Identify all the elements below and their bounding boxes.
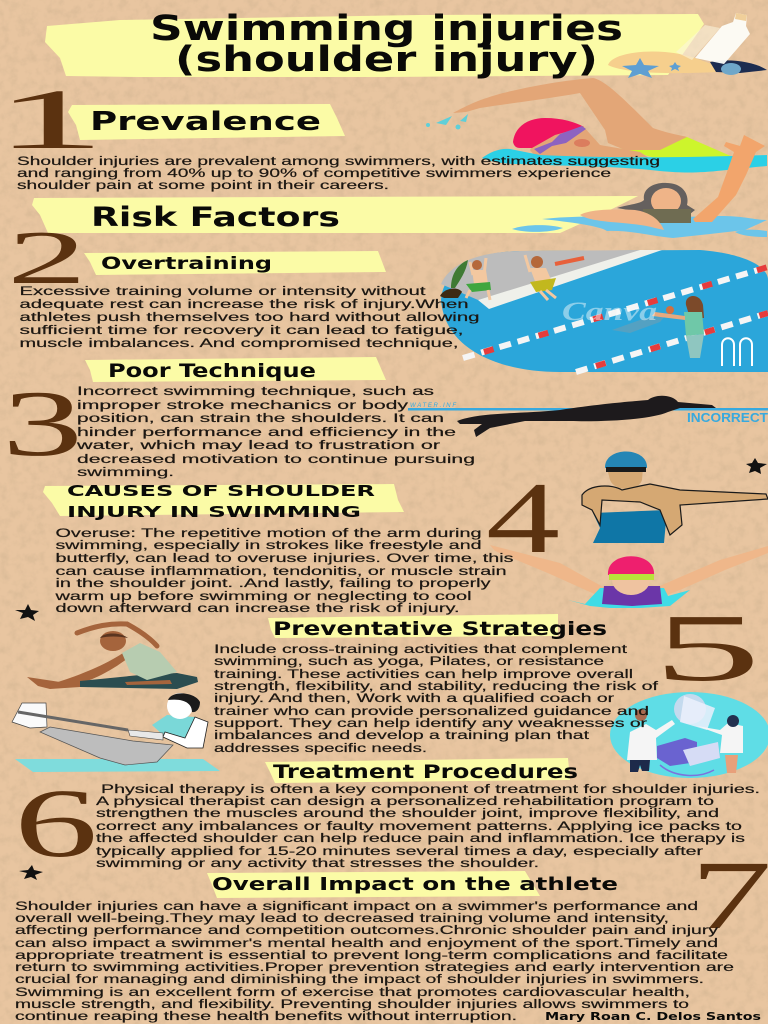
Preventative Strategies heading band: Preventative Strategies (273, 618, 607, 640)
Poor Technique text: swimming. (77, 465, 174, 479)
Preventative text: Include cross-training activities that complement (214, 642, 628, 656)
Treatment text: strengthen the muscles around the shoulder joint, improve flexibility, and (96, 806, 719, 820)
Poor Technique text: water, which may lead to frustration or (75, 438, 440, 452)
Overtraining text: muscle imbalances. And compromised technique, (20, 336, 458, 350)
author credit: Mary Roan C. Delos Santos (545, 1011, 761, 1023)
Poor Technique text: Incorrect swimming technique, such as (77, 384, 434, 398)
illustration: incorrect swimming position silhouette: INCORRECT (687, 410, 768, 425)
illustration: incorrect swimming position silhouette: WATER.INF (410, 403, 456, 409)
Prevalence heading band: Prevalence (90, 107, 321, 137)
palm plant (440, 289, 462, 298)
Preventative text (214, 642, 659, 755)
Treatment text (96, 782, 760, 870)
illustration: mat (15, 759, 220, 772)
Treatment text: swimming or any activity that stresses the shoulder. (96, 856, 539, 870)
illustration: butterfly swimmer (490, 545, 768, 608)
number 2: 2 (7, 216, 87, 300)
title (150, 9, 623, 80)
Preventative text: addresses specific needs. (214, 741, 427, 755)
Overtraining text: athletes push themselves too hard without allowing (20, 310, 480, 324)
number 5: 5 (653, 594, 761, 701)
Overall Impact heading band: Overall Impact on the athlete (212, 875, 618, 895)
star (746, 458, 767, 474)
illustration: beach sand with bottle, starfish and shell (608, 13, 767, 78)
Overall Impact text (15, 899, 734, 1023)
Overall Impact text: continue reaping these health benefits without interruption. (15, 1009, 517, 1023)
Causes text (54, 526, 513, 615)
Prevalence text (17, 154, 660, 192)
Causes text: in the shoulder joint. .And lastly, failing to properly (56, 576, 492, 590)
lane ropes (463, 267, 768, 358)
instructor and child in water (652, 296, 704, 358)
ladder (722, 338, 752, 366)
Preventative text: swimming, such as yoga, Pilates, or resistance (214, 654, 604, 668)
Poor Technique text: hinder performance and efficiency in the (77, 425, 456, 439)
child on deck, yellow shorts (525, 255, 556, 300)
Treatment text: correct any imbalances or faulty movement patterns. Applying ice packs to (96, 819, 742, 833)
illustration: resistance band exercise (12, 693, 208, 765)
Causes heading band (43, 482, 404, 521)
illustration: stretching swimmer with blue cap (582, 452, 768, 543)
Causes text: swimming, especially in strokes like freestyle and (56, 538, 482, 552)
float on deck (555, 258, 584, 264)
Preventative text: support. They can help identify any weaknesses or (214, 716, 647, 730)
Treatment text: the affected shoulder can help reduce pain and inflammation. Ice therapy is (96, 831, 745, 845)
Overtraining text (20, 284, 480, 350)
Prevalence heading band (68, 104, 345, 140)
Overtraining heading band: Overtraining (101, 254, 272, 274)
number 3: 3 (2, 372, 83, 476)
number 4: 4 (486, 462, 560, 575)
Poor Technique text: improper stroke mechanics or body (77, 398, 410, 412)
Prevalence text: Shoulder injuries are prevalent among swimmers, with estimates suggesting (17, 154, 660, 168)
Preventative text: injury. And then, Work with a qualified coach or (214, 691, 614, 705)
Causes text: down afterward can increase the risk of injury. (56, 601, 460, 615)
star (19, 865, 43, 880)
Causes heading band: CAUSES OF SHOULDER (67, 482, 375, 500)
illustration: doctors in teal circle (610, 692, 768, 778)
Causes text: Overuse: The repetitive motion of the arm during (56, 526, 482, 540)
Overall Impact text: can also impact a swimmer's mental health and enjoyment of the sport.Timely and (15, 936, 718, 950)
Overall Impact text: return to swimming activities.Proper prevention strategies and early intervention are (15, 960, 734, 974)
Overall Impact text: affecting performance and competition outcomes.Chronic shoulder pain and injury (15, 923, 719, 937)
Overtraining text: adequate rest can increase the risk of injury.When (20, 297, 468, 311)
Causes text: warm up before swimming or neglecting to cool (54, 589, 471, 603)
number 6: 6 (14, 770, 98, 878)
title: (shoulder injury) (175, 40, 598, 80)
illustration: freestyle swimmer (426, 78, 767, 172)
Poor Technique text: position, can strain the shoulders. It can (77, 411, 444, 425)
title: Swimming injuries (150, 9, 623, 49)
Poor Technique heading band: Poor Technique (108, 360, 316, 382)
Causes text: butterfly, can lead to overuse injuries. Over time, this (56, 551, 514, 565)
Preventative text: trainer who can provide personalized guidance and (214, 704, 649, 718)
Causes text: can cause inflammation, tendonitis, or muscle strain (56, 564, 506, 578)
illustration: pool with lane ropes and swimmers (440, 250, 768, 372)
Preventative text: imbalances and develop a training plan that (214, 728, 590, 742)
Overall Impact text: overall well-being.They may lead to decreased training volume and intensity, (15, 911, 669, 925)
Overall Impact heading band (207, 871, 618, 898)
Overall Impact text: muscle strength, and flexibility. Preventing shoulder injuries allows swimmers to (15, 997, 689, 1011)
number 7: 7 (690, 842, 768, 950)
Preventative text: training. These activities can help improve overall (214, 667, 633, 681)
Treatment text: typically applied for 15-20 minutes several times a day, especially after (96, 844, 703, 858)
Canva watermark: Canva (562, 297, 657, 326)
illustration: incorrect swimming position silhouette (408, 396, 768, 437)
yellow title band (45, 14, 704, 77)
Poor Technique heading band (85, 357, 386, 382)
Overtraining text: Excessive training volume or intensity without (20, 284, 427, 298)
Prevalence text: shoulder pain at some point in their careers. (17, 178, 389, 192)
Overall Impact text: appropriate treatment is essential to prevent long-term complications and facilitate (15, 948, 728, 962)
Treatment Procedures heading band: Treatment Procedures (273, 761, 578, 783)
Poor Technique text (75, 384, 475, 479)
Overall Impact text: Shoulder injuries can have a significant impact on a swimmer's performance and (15, 899, 698, 913)
Risk Factors heading band (32, 196, 638, 233)
star (15, 604, 39, 621)
Preventative Strategies heading band (268, 614, 607, 640)
Overtraining text: sufficient time for recovery it can lead to fatigue, (20, 323, 464, 337)
child on deck, green shorts (466, 258, 491, 300)
Causes heading band: INJURY IN SWIMMING (67, 503, 361, 521)
Preventative text: strength, flexibility, and stability, reducing the risk of (214, 679, 659, 693)
illustration: seated yoga stretch (27, 624, 198, 689)
Overall Impact text: crucial for managing and diminishing the impact of shoulder injuries in swimmers. (15, 972, 704, 986)
Treatment Procedures heading band (265, 758, 578, 783)
Overall Impact text: Swimming is an excellent form of exercise that promotes cardiovascular health, (15, 985, 690, 999)
swimmer shadow in water (612, 316, 665, 333)
illustration: swimmer waving at pool edge (512, 135, 767, 238)
Treatment text: Physical therapy is often a key component of treatment for shoulder injuries. (101, 782, 760, 796)
Treatment text: A physical therapist can design a personalized rehabilitation program to (96, 794, 714, 808)
Overtraining heading band (84, 251, 386, 275)
Poor Technique text: decreased motivation to continue pursuing (77, 452, 475, 466)
Risk Factors heading band: Risk Factors (91, 202, 340, 233)
Prevalence text: and ranging from 40% up to 90% of competitive swimmers experience (17, 166, 611, 180)
